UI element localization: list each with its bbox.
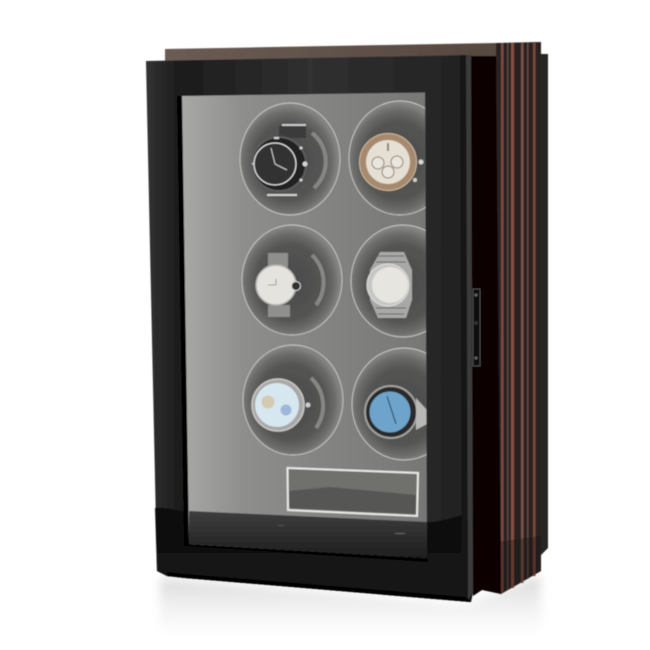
- door frame: [146, 55, 473, 602]
- glass surround shadow: [177, 96, 428, 562]
- winder 1 with dark-dial watch: [240, 103, 340, 215]
- door latch: [473, 289, 480, 366]
- cabinet dark back edge: [541, 54, 548, 555]
- winder 5 with pale blue dial watch: [243, 345, 343, 455]
- door side strips: [460, 55, 468, 601]
- floor reflection: [160, 575, 542, 635]
- winder 4 with silver bracelet watch: [350, 224, 427, 338]
- cabinet wood top edge: [165, 43, 496, 61]
- display panel: [288, 468, 418, 516]
- winder 2 with gold chronograph watch: [348, 100, 426, 216]
- winder 3 with silver roman-dial watch: [242, 225, 342, 335]
- product illustration: six-watch winder cabinet: [145, 41, 549, 618]
- cabinet side: striped wood veneer: [496, 42, 541, 594]
- cabinet black recess between door and side: [470, 56, 501, 596]
- glossy lower reflection: [155, 508, 473, 602]
- winder 6 with blue dial watch: [351, 346, 428, 462]
- glass window: [182, 92, 427, 558]
